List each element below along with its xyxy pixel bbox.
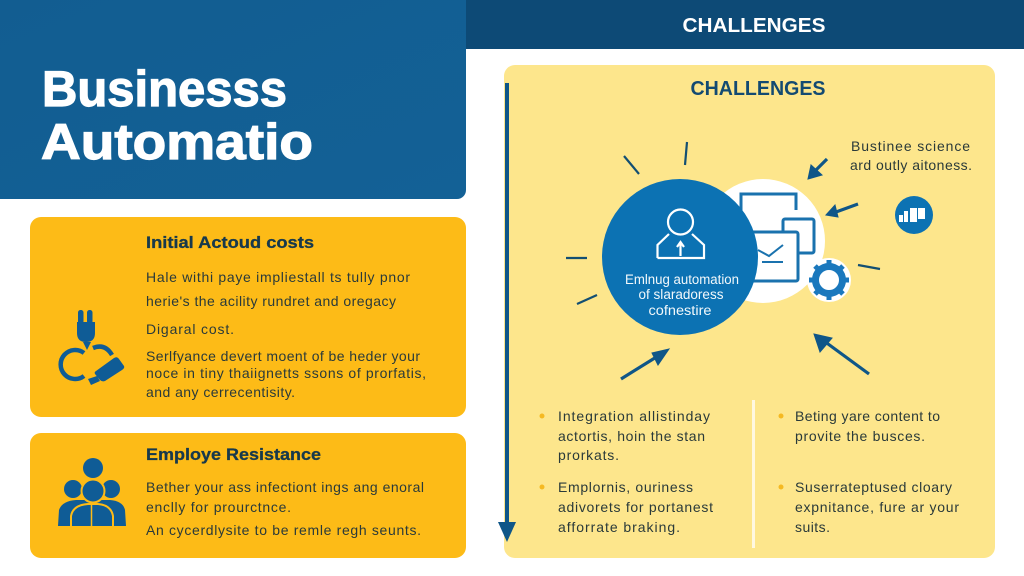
bullets right: Beting yare content to	[795, 408, 940, 424]
bullets left: Integration allistinday	[558, 408, 710, 424]
side text: Bustinee science	[851, 138, 970, 154]
bullets left: adivorets for portanest	[558, 499, 713, 515]
bullets right: expnitance, fure ar your	[795, 499, 959, 515]
bullets left: Emplornis, ouriness	[558, 479, 693, 495]
body text: noce in tiny thaiignetts ssons of prorfatis,	[146, 365, 426, 381]
body text: and any cerrecentisity.	[146, 384, 295, 400]
bullets left: actortis, hoin the stan	[558, 428, 705, 444]
body text	[146, 269, 426, 400]
panel: employee resistance	[30, 433, 466, 558]
panel: initial costs	[30, 217, 466, 417]
heading: Initial Actoud costs	[146, 233, 314, 252]
body text	[146, 479, 424, 538]
bullets right: suits.	[795, 519, 830, 535]
bullets right: Suserrateptused cloary	[795, 479, 952, 495]
body text: Serlfyance devert moent of be heder your	[146, 348, 420, 364]
icon: bar chart badge	[895, 196, 933, 234]
bullets left	[540, 408, 713, 535]
title panel: Automatio	[41, 114, 313, 170]
panel: challenges	[498, 65, 995, 558]
body text: herie's the acility rundret and oregacy	[146, 293, 396, 309]
icon: gear	[807, 258, 851, 302]
side text: ard outly aitoness.	[850, 157, 972, 173]
radial ticks	[566, 142, 880, 304]
icon: person	[658, 210, 704, 258]
diagram: white circle with documents	[701, 179, 825, 303]
divider	[752, 400, 755, 548]
bullets left: prorkats.	[558, 447, 619, 463]
blue circle callout	[602, 179, 758, 335]
bullets left: afforrate braking.	[558, 519, 680, 535]
body text: Digaral cost.	[146, 321, 234, 337]
circle text	[625, 272, 739, 318]
heading: Employe Resistance	[146, 445, 321, 464]
arrow: vertical	[498, 83, 516, 542]
body text: An cycerdlysite to be remle regh seunts.	[146, 522, 421, 538]
title panel: Businesss	[42, 61, 287, 117]
side text	[850, 138, 972, 173]
header band: CHALLENGES	[682, 15, 826, 37]
heading: CHALLENGES	[690, 78, 826, 100]
bullets right	[778, 408, 959, 535]
arrows	[621, 159, 869, 379]
title panel	[0, 0, 466, 199]
body text: Bether your ass infectiont ings ang enoral	[146, 479, 424, 495]
body text: Hale withi paye impliestall ts tully pnor	[146, 269, 410, 285]
circle text: cofnestire	[648, 303, 712, 318]
circle text: Emlnug automation	[625, 272, 739, 287]
icon: people	[58, 458, 126, 527]
icon: plug	[61, 310, 124, 385]
circle text: of slaradoress	[638, 287, 724, 302]
body text: enclly for prourctnce.	[146, 499, 291, 515]
bullets right: provite the busces.	[795, 428, 925, 444]
header band	[466, 0, 1024, 49]
